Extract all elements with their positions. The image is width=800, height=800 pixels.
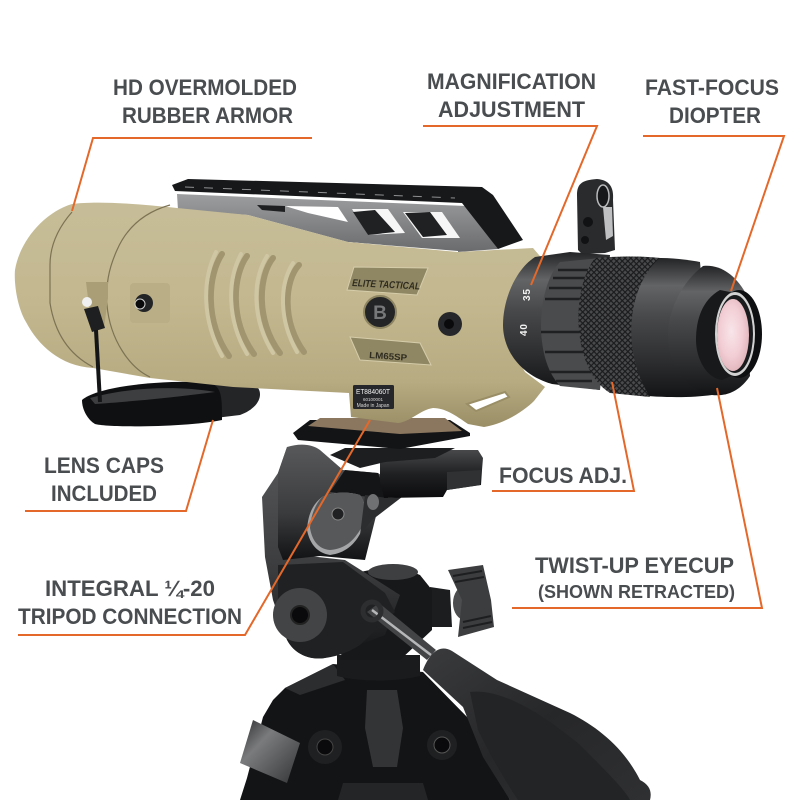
knurled focus ring: [578, 256, 660, 397]
quick release clamp: [380, 450, 483, 498]
callout: lens caps included: LENS CAPS: [44, 453, 164, 478]
strap lug: [86, 282, 108, 330]
lower head body: [273, 562, 395, 658]
callout: fast-focus diopter: FAST-FOCUS: [645, 75, 779, 100]
tripod: [240, 418, 651, 800]
bracket plate: [177, 194, 498, 252]
callout: HD overmolded rubber armor: [72, 75, 312, 211]
callout: magnification adjustment: MAGNIFICATION: [427, 69, 596, 94]
right screw: [438, 312, 462, 336]
callout: HD overmolded rubber armor: RUBBER ARMOR: [122, 103, 293, 128]
scope body: Made in Japan: [357, 403, 390, 409]
eyepiece assembly: [503, 179, 762, 397]
scope body: LM65SP: [369, 350, 407, 363]
serial plate: [353, 385, 394, 409]
pan handle grip: [423, 648, 651, 800]
magnification numbers: 40: [519, 324, 530, 336]
callout: focus adjustment: FOCUS ADJ.: [499, 463, 627, 488]
callout: focus adjustment: [492, 382, 634, 491]
picatinny rail: [172, 179, 523, 249]
callout: twist-up eyecup: (SHOWN RETRACTED): [538, 582, 735, 602]
neck: [337, 655, 420, 680]
scope body: [15, 203, 545, 427]
callout: magnification adjustment: ADJUSTMENT: [438, 97, 586, 122]
callout: twist-up eyecup: TWIST-UP EYECUP: [535, 553, 734, 578]
brand logo: [364, 296, 396, 328]
tripod leg collar: [240, 720, 300, 783]
tilt link: [360, 495, 402, 535]
callout: integral tripod connection: [18, 420, 370, 635]
magnification numbers: 35: [522, 289, 533, 301]
callout: fast-focus diopter: DIOPTER: [669, 103, 761, 128]
callout: HD overmolded rubber armor: HD OVERMOLDED: [113, 75, 297, 100]
callout: fast-focus diopter: [643, 75, 784, 291]
tilt disc: [307, 493, 366, 555]
fold sight: [577, 179, 615, 254]
rail bracket on top of scope: [172, 179, 523, 252]
inner rubber ribs: [696, 290, 745, 380]
eyepiece lens: [715, 290, 762, 378]
lens cap strap: [96, 330, 100, 402]
callout: lens caps included: INCLUDED: [51, 481, 157, 506]
callout: magnification adjustment: [423, 69, 597, 285]
eyecup: [668, 266, 750, 395]
model plate top: [347, 267, 428, 295]
scope body: 60100001: [363, 397, 384, 402]
tripod crown and legs: [240, 664, 510, 800]
model plate bottom: [350, 337, 431, 365]
callout: twist-up eyecup: [512, 388, 762, 608]
scope body: B: [373, 303, 387, 324]
callout: integral tripod connection: TRIPOD CONNECTION: [18, 604, 242, 629]
pan barrel: [340, 565, 432, 660]
scope body: ELITE TACTICAL: [352, 278, 420, 293]
tilt knob: [430, 565, 494, 637]
grip ribs: [206, 252, 304, 356]
left screw: [130, 283, 170, 323]
smooth cylinder: [625, 258, 712, 397]
pivot disc: [273, 588, 327, 642]
ribbed ring: [541, 258, 600, 390]
head outer frame: [262, 447, 400, 658]
callout: lens caps included: [25, 420, 213, 511]
magnification numbers: [519, 289, 533, 336]
pan handle rod: [363, 602, 436, 660]
head upper block: [278, 445, 388, 560]
body seams: [50, 212, 93, 367]
scope body: ET884060T: [356, 389, 391, 396]
lens caps: [82, 382, 260, 426]
foot slot: [467, 392, 509, 411]
bracket windows: [285, 206, 348, 222]
magnification ring: [503, 252, 610, 390]
callout: integral tripod connection: INTEGRAL ¼-20: [45, 576, 215, 601]
quick release plate: [293, 420, 470, 449]
